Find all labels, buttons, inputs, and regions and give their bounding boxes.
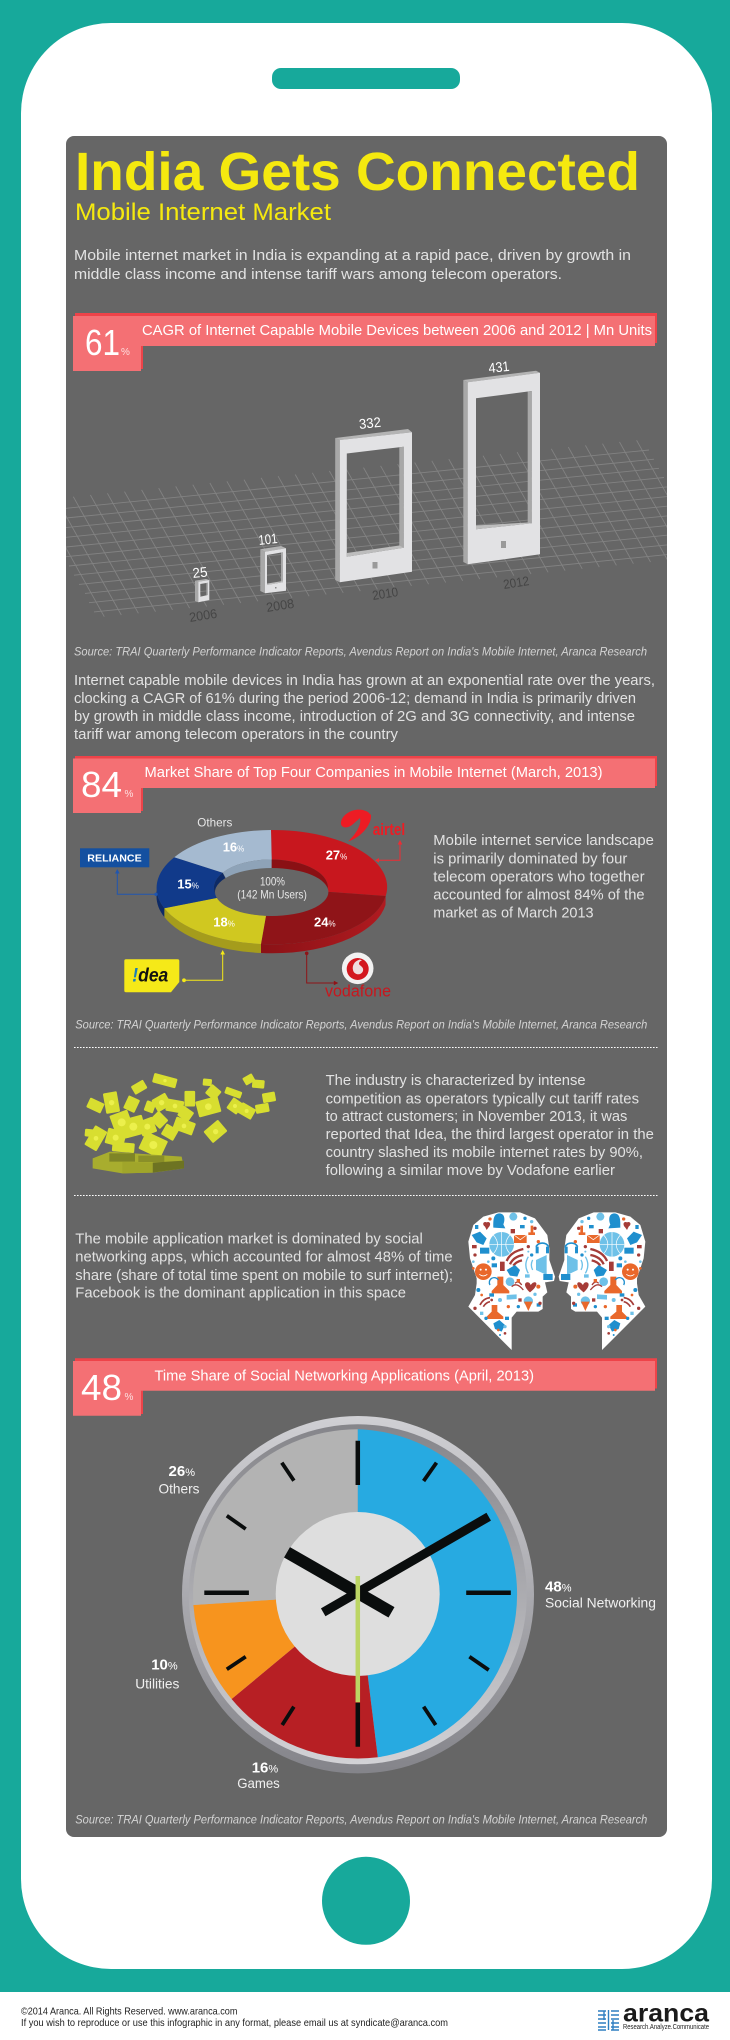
paragraph: device growth: by growth in middle class income, introduction of 2G and 3G connectivity, and intense [74, 708, 635, 725]
phone home button [322, 1857, 410, 1945]
donut centre text: 100% [260, 875, 285, 889]
icon: left head with social icons [468, 1212, 555, 1350]
text: service landscape: Mobile internet service landscape [433, 832, 654, 849]
donut percent labels: 16% [223, 840, 244, 855]
device bar 2010 [335, 429, 412, 582]
panel: main content [66, 136, 667, 1837]
icon: flying money [86, 1074, 275, 1173]
segment: Vodafone 24% [261, 892, 386, 944]
paragraph: device growth: tariff war among telecom operators in the country [74, 726, 398, 743]
label: Utilities 10%: 10% [151, 1656, 178, 1673]
clock bezel [182, 1416, 534, 1773]
text: tariff competition: The industry is characterized by intense [326, 1072, 586, 1089]
source note 2: Source: TRAI Quarterly Performance Indicator Reports, Avendus Report on India's Mobile Internet, Aranca Research [75, 1019, 647, 1031]
chart: device growth 2006 to 2012 [66, 362, 667, 622]
year labels: 2010 [371, 584, 399, 603]
donut percent labels: 18% [213, 915, 235, 930]
value labels: 101 [258, 530, 278, 548]
source note 1: Source: TRAI Quarterly Performance Indicator Reports, Avendus Report on India's Mobile Internet, Aranca Research [74, 646, 647, 658]
logo mark [598, 2010, 619, 2030]
title: India Gets Connected [75, 142, 640, 202]
logo: Reliance [80, 848, 149, 867]
clock second hand [356, 1576, 360, 1702]
chart: clock share of time [182, 1416, 534, 1773]
logo: Idea [124, 959, 179, 992]
footer copyright text [21, 2005, 448, 2029]
phone speaker [272, 68, 460, 89]
arrow: Reliance connector [115, 869, 158, 896]
donut chart: market share [156, 816, 387, 953]
clock hour hand [287, 1552, 392, 1612]
paragraph: device growth [74, 672, 655, 743]
banner: 61% CAGR heading [73, 313, 657, 371]
logo: Aranca: Research.Analyze.Communicate [623, 2024, 709, 2031]
slice: Others 26% [193, 1429, 358, 1605]
subtitle: Mobile Internet Market [75, 199, 331, 226]
intro text: middle class income and intense tariff wars among telecom operators. [74, 266, 562, 283]
banner: 48% time share heading [73, 1358, 657, 1416]
year labels: 2006 [188, 606, 218, 625]
label: Others: Others [197, 816, 232, 830]
label: Social Networking 48% [545, 1579, 656, 1610]
value labels: 25 [192, 563, 208, 581]
text: service landscape: telecom operators who together [433, 869, 645, 886]
value labels [192, 358, 510, 581]
banner: 61% CAGR heading: 61 [85, 322, 120, 363]
slice: Games 16% [232, 1594, 378, 1759]
banner: 48% time share heading: Time Share of Social Networking Applications (April, 2013) [154, 1368, 534, 1385]
device bar 2012 [463, 371, 540, 564]
text: mobile application market: Facebook is the dominant application in this space [75, 1285, 406, 1302]
intro text: Mobile internet market in India is expanding at a rapid pace, driven by growth in [74, 247, 631, 264]
slice: Utilities 10% [193, 1594, 358, 1699]
banner: 61% CAGR heading: CAGR of Internet Capable Mobile Devices between 2006 and 2012 | Mn Units [142, 322, 652, 339]
label: Games 16%: Games [237, 1775, 280, 1791]
text: service landscape [433, 832, 654, 921]
label: Utilities 10%: Utilities [135, 1675, 179, 1691]
logo: Idea: !dea [132, 966, 169, 987]
text: tariff competition: to attract customers; in November 2013, it was [326, 1108, 627, 1125]
value labels: 431 [488, 358, 510, 376]
device bar 2008 [260, 546, 286, 593]
banner: 84% market share heading: Market Share of Top Four Companies in Mobile Internet (March, 2013) [144, 764, 602, 781]
text: tariff competition [326, 1072, 654, 1179]
arrow: Vodafone connector [305, 952, 338, 985]
text: tariff competition: reported that Idea, the third largest operator in the [326, 1126, 654, 1143]
text: mobile application market: The mobile application market is dominated by social [75, 1230, 423, 1247]
logo: Vodafone: vodafone [325, 983, 391, 1001]
intro text [74, 247, 631, 283]
text: tariff competition: following a similar move by Vodafone earlier [326, 1162, 615, 1179]
donut percent labels: 24% [314, 915, 336, 930]
text: tariff competition: country slashed its mobile internet rates by 90%, [326, 1144, 643, 1161]
donut centre text: (142 Mn Users) [237, 888, 307, 902]
source note 3: Source: TRAI Quarterly Performance Indicator Reports, Avendus Report on India's Mobile Internet, Aranca Research [75, 1814, 647, 1826]
text: service landscape: accounted for almost 84% of the [433, 886, 645, 903]
text: mobile application market: share (share of total time spent on mobile to surf internet); [75, 1267, 453, 1284]
donut percent labels: 15% [177, 876, 199, 891]
donut hole [215, 868, 328, 916]
text: service landscape: market as of March 2013 [433, 904, 594, 921]
banner: 84% market share heading: % [124, 789, 134, 800]
logo: Airtel [341, 810, 405, 842]
text: mobile application market: networking apps, which accounted for almost 48% of time [75, 1249, 453, 1266]
label: Games 16%: 16% [252, 1760, 278, 1777]
label: Utilities 10% [135, 1656, 179, 1691]
slice: Social Networking 48% [358, 1429, 517, 1757]
clock hour ticks [204, 1441, 511, 1747]
device bar 2006 [195, 579, 209, 602]
paragraph: device growth: Internet capable mobile devices in India has grown at an exponential rate over the years, [74, 672, 655, 689]
banner: 84% market share heading: 84 [81, 764, 122, 805]
label: Others 26%: Others [158, 1480, 200, 1496]
value labels: 332 [358, 414, 382, 432]
banner: 61% CAGR heading: % [121, 347, 130, 358]
label: Others 26%: 26% [168, 1463, 195, 1480]
text: tariff competition: competition as operators typically cut tariff rates [326, 1090, 639, 1107]
segment: Others 16% [174, 830, 272, 873]
logo: Vodafone [325, 952, 391, 1001]
donut percent labels: 27% [326, 847, 347, 862]
footer copyright text: ©2014 Aranca. All Rights Reserved. www.aranca.com [21, 2005, 238, 2017]
paragraph: device growth: clocking a CAGR of 61% during the period 2006-12; demand in India is primarily driven [74, 690, 636, 707]
logo: Reliance: RELIANCE [87, 853, 142, 865]
arrow: Idea connector [182, 950, 225, 982]
label: Social Networking 48%: 48% [545, 1579, 572, 1596]
text: service landscape: is primarily dominated by four [433, 850, 627, 867]
clock minute hand [323, 1517, 489, 1612]
icon: right head with social icons [559, 1212, 645, 1350]
donut side walls [156, 887, 386, 953]
segment: Idea 18% [164, 898, 266, 944]
segment: Airtel 27% [271, 830, 387, 896]
text: mobile application market [75, 1230, 453, 1302]
segment: Reliance 15% [157, 857, 223, 908]
label: Games 16% [237, 1760, 280, 1791]
donut percent labels [177, 840, 347, 930]
footer copyright text: If you wish to reproduce or use this infographic in any format, please email us at syndicate@aranca.com [21, 2017, 448, 2029]
year labels: 2012 [502, 573, 530, 592]
banner: 84% market share heading [73, 756, 657, 813]
donut centre text [237, 875, 307, 902]
year labels [188, 573, 530, 625]
logo: Airtel: airtel [373, 820, 405, 839]
donut inner wall [214, 859, 328, 898]
arrow: Airtel connector [375, 840, 402, 863]
label: Others 26% [158, 1463, 200, 1496]
banner: 48% time share heading: 48 [81, 1367, 122, 1408]
logo: Aranca: aranca [623, 2000, 710, 2028]
label: Social Networking 48%: Social Networking [545, 1594, 656, 1610]
banner: 48% time share heading: % [124, 1392, 134, 1403]
year labels: 2008 [265, 596, 295, 615]
logo: Aranca [598, 2000, 710, 2031]
clock centre disc [276, 1512, 440, 1676]
